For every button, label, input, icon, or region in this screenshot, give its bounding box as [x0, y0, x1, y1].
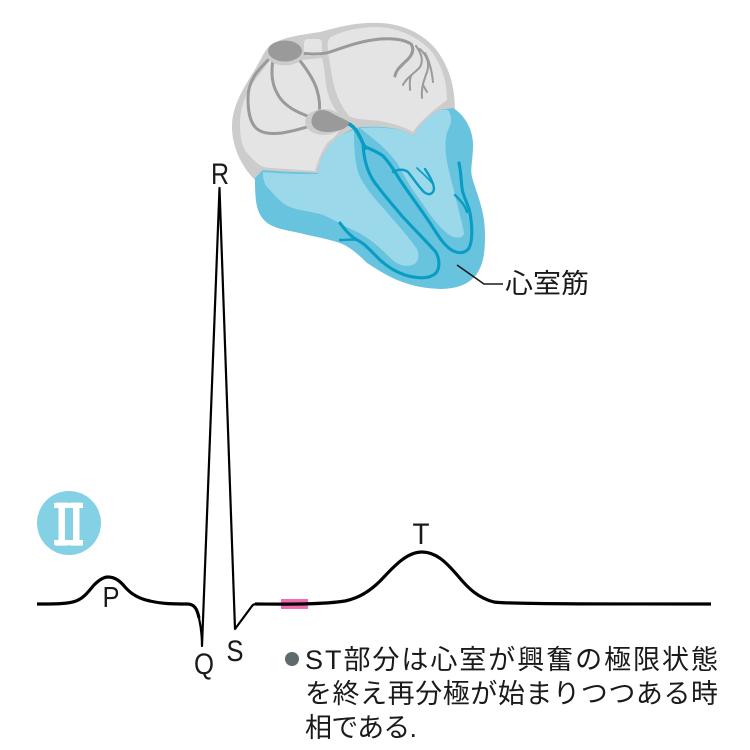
ECG waveform [37, 188, 711, 646]
panel: right chamber of atria [328, 27, 447, 132]
panel: left chamber of atria [240, 58, 341, 171]
wave label T: T [412, 518, 430, 551]
ventricular conduction fibres [340, 124, 472, 278]
AV node [311, 110, 349, 132]
panel: atria outer wall [232, 23, 455, 180]
sinus node halo [266, 40, 304, 66]
panel: ventricle muscle [255, 108, 485, 289]
label: lead II badge: II [54, 489, 84, 559]
atrial conduction fibres [248, 39, 433, 133]
panel: small atrial pocket [304, 39, 322, 56]
bullet [285, 652, 299, 666]
wave label S: S [226, 635, 244, 668]
explanation text: ST部分は心室が興奮の極限状態 [305, 645, 718, 675]
callout [285, 645, 718, 743]
wave label P: P [102, 582, 120, 614]
wave label R: R [211, 158, 229, 191]
explanation text: 相である. [305, 713, 417, 743]
sinus node [268, 40, 302, 62]
panel: right ventricle cavity [360, 110, 464, 238]
explanation text [305, 645, 718, 743]
leader line to label [457, 265, 503, 284]
panel: left ventricle cavity [263, 130, 418, 266]
AV node halo [305, 109, 343, 135]
label: lead II badge [37, 489, 101, 559]
explanation text: を終え再分極が始まりつつある時 [305, 679, 718, 709]
label: ventricular muscle: 心室筋 [505, 269, 589, 299]
heart diagram [232, 23, 503, 289]
wave label Q: Q [194, 648, 214, 681]
ST segment highlight [281, 599, 308, 609]
